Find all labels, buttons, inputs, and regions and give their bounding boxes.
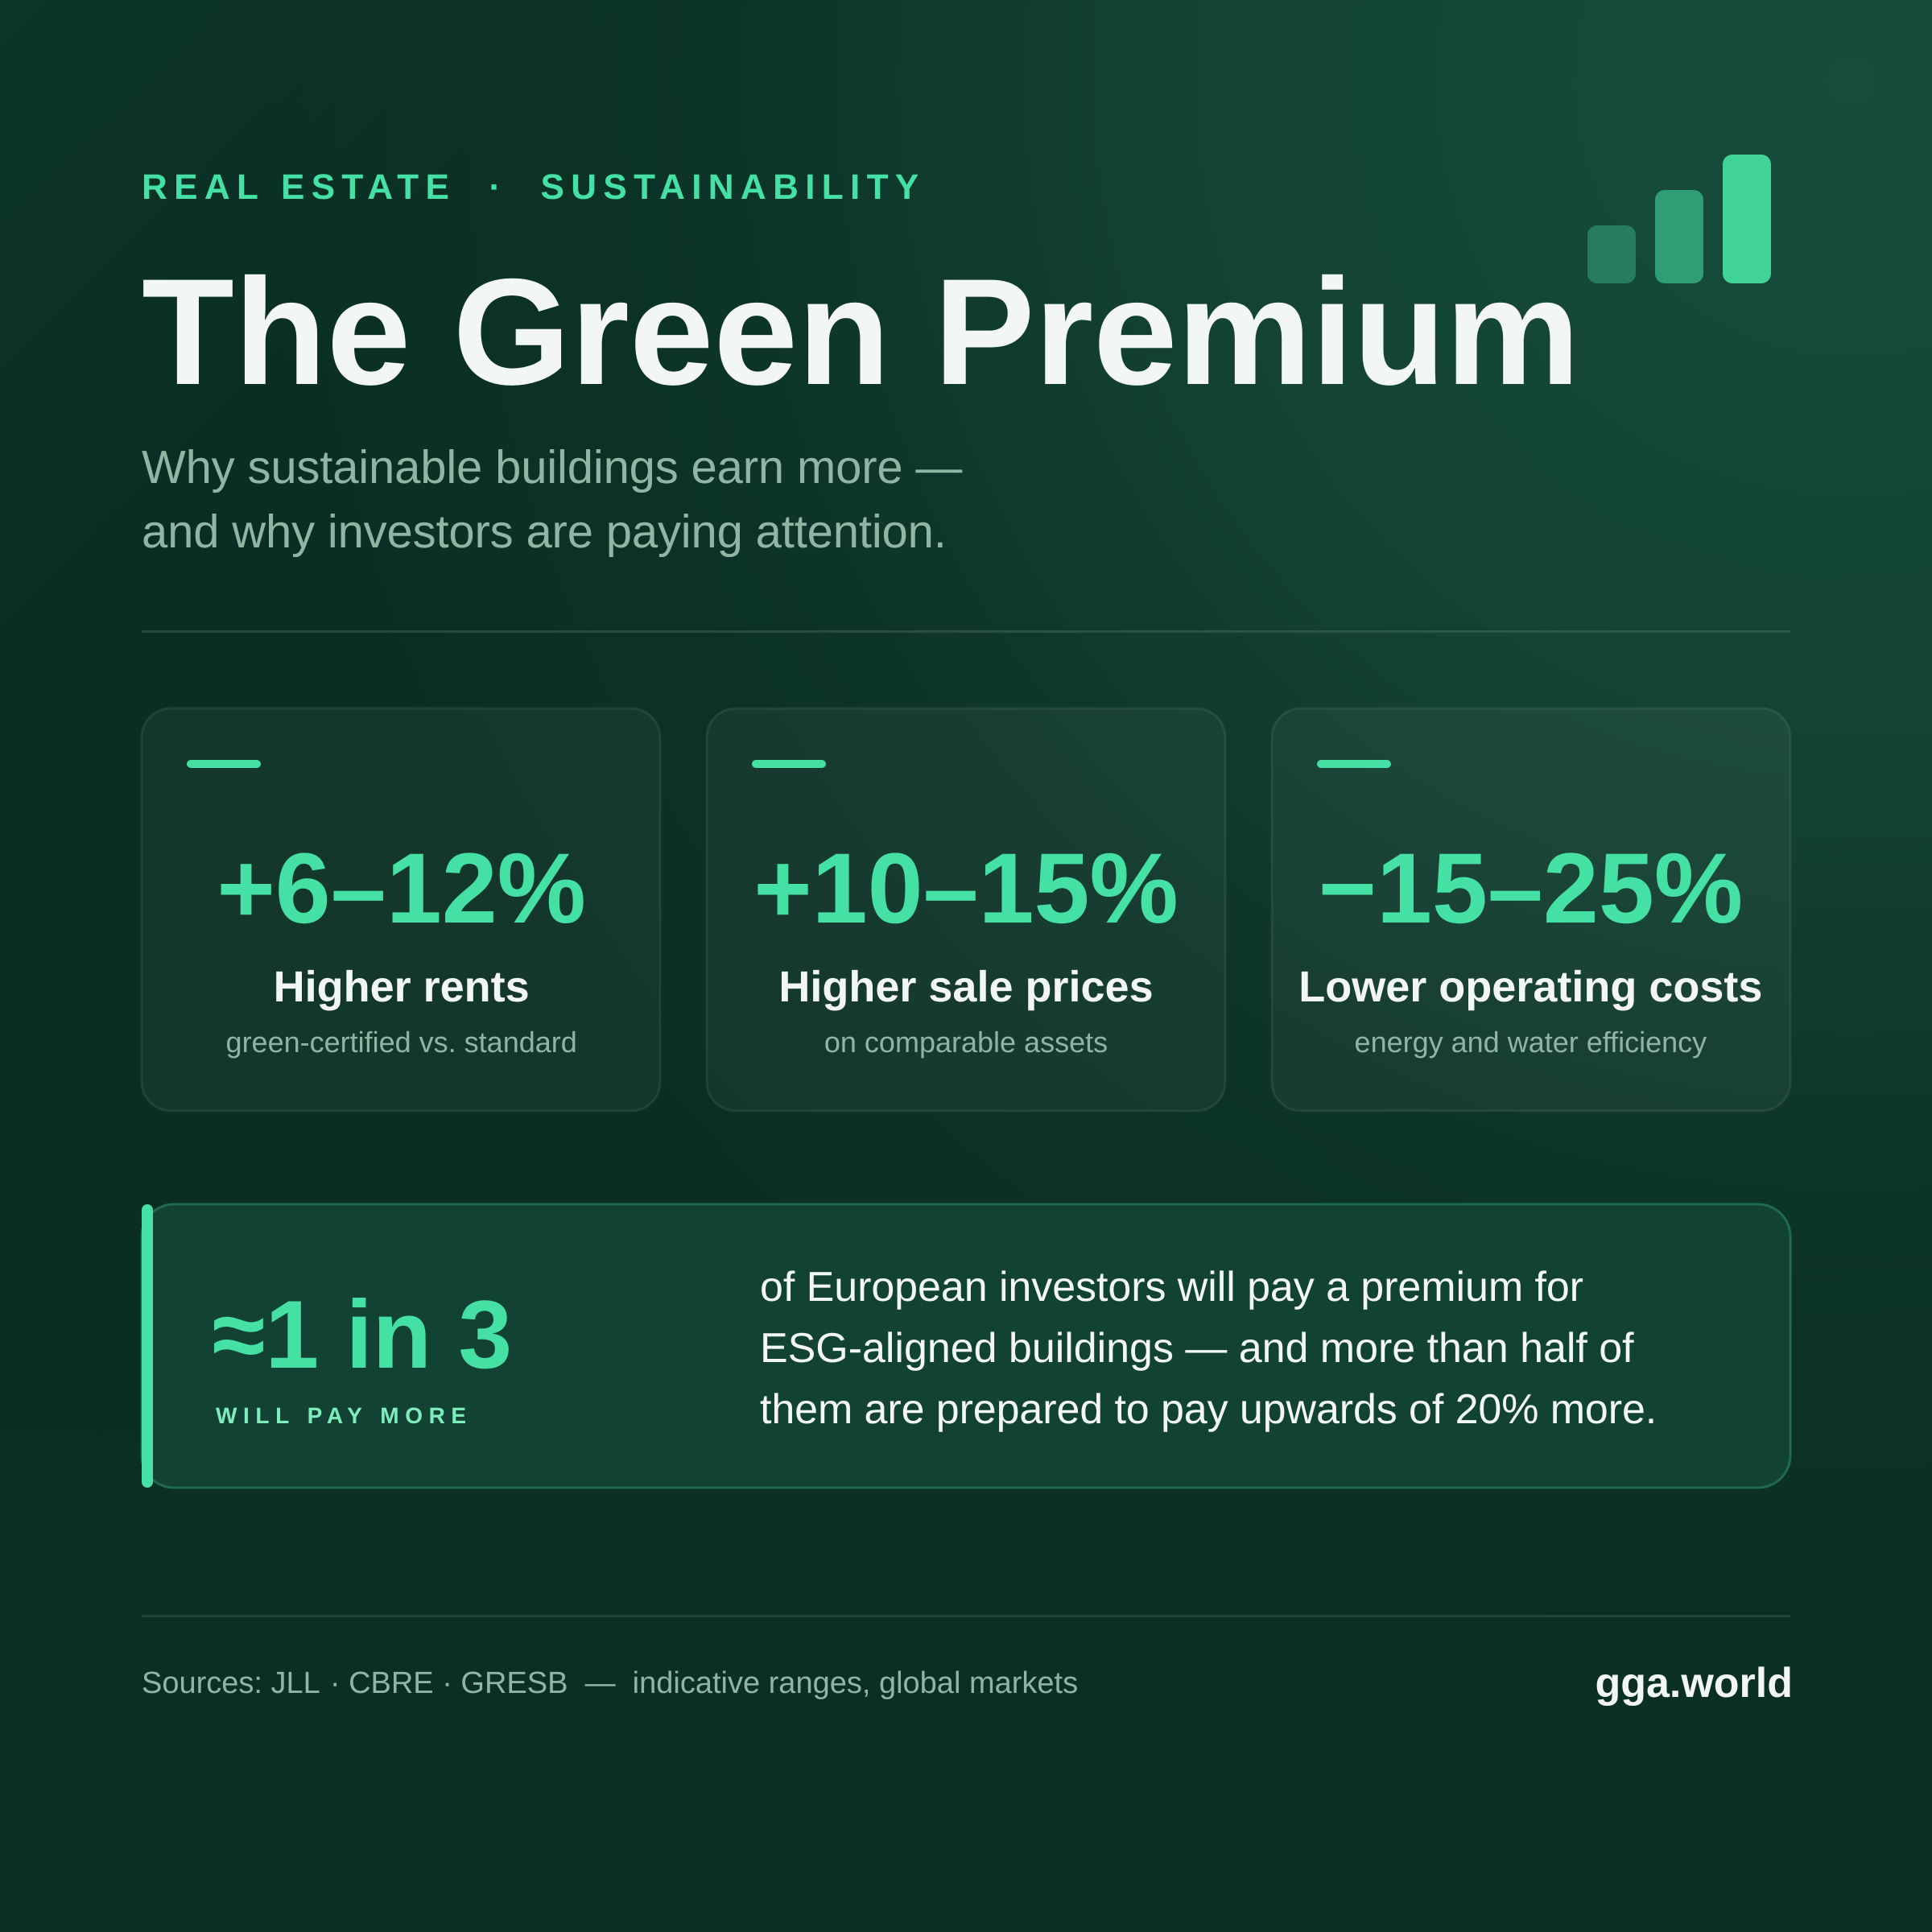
callout text: ESG-aligned buildings — and more than half of bbox=[760, 1325, 1634, 1372]
subtitle: Why sustainable buildings earn more — bbox=[142, 441, 962, 493]
eyebrow label: REAL ESTATE · SUSTAINABILITY bbox=[142, 167, 926, 207]
stat note: green-certified vs. standard bbox=[226, 1026, 577, 1059]
callout value: ≈1 in 3 bbox=[213, 1281, 512, 1389]
panel: higher rents bbox=[140, 707, 662, 1113]
brand: gga.world bbox=[1595, 1660, 1793, 1707]
stat value: +10–15% bbox=[753, 833, 1179, 944]
panel: investor callout bbox=[140, 1203, 1792, 1489]
stat label: Higher rents bbox=[274, 963, 530, 1011]
stat label: Lower operating costs bbox=[1298, 963, 1762, 1011]
callout text bbox=[760, 1264, 1657, 1433]
callout text: of European investors will pay a premium for bbox=[760, 1264, 1583, 1311]
stat note: on comparable assets bbox=[824, 1026, 1108, 1059]
callout text: them are prepared to pay upwards of 20% more. bbox=[760, 1386, 1657, 1433]
panel: higher sale prices bbox=[705, 707, 1227, 1113]
accent dash bbox=[1317, 760, 1391, 768]
stat label: Higher sale prices bbox=[778, 963, 1154, 1011]
accent dash bbox=[187, 760, 261, 768]
accent dash bbox=[752, 760, 826, 768]
accent bar bbox=[142, 1204, 153, 1488]
subtitle: and why investors are paying attention. bbox=[142, 506, 947, 558]
panel: lower operating costs bbox=[1270, 707, 1792, 1113]
callout caption: WILL PAY MORE bbox=[216, 1403, 473, 1428]
stat note: energy and water efficiency bbox=[1355, 1026, 1707, 1059]
subtitle bbox=[142, 441, 963, 558]
title: The Green Premium bbox=[142, 247, 1579, 416]
stat value: −15–25% bbox=[1319, 833, 1743, 944]
stat value: +6–12% bbox=[217, 833, 586, 944]
sources: Sources: JLL · CBRE · GRESB — indicative ranges, global markets bbox=[142, 1666, 1078, 1700]
icon: rising bars bbox=[1587, 155, 1771, 283]
